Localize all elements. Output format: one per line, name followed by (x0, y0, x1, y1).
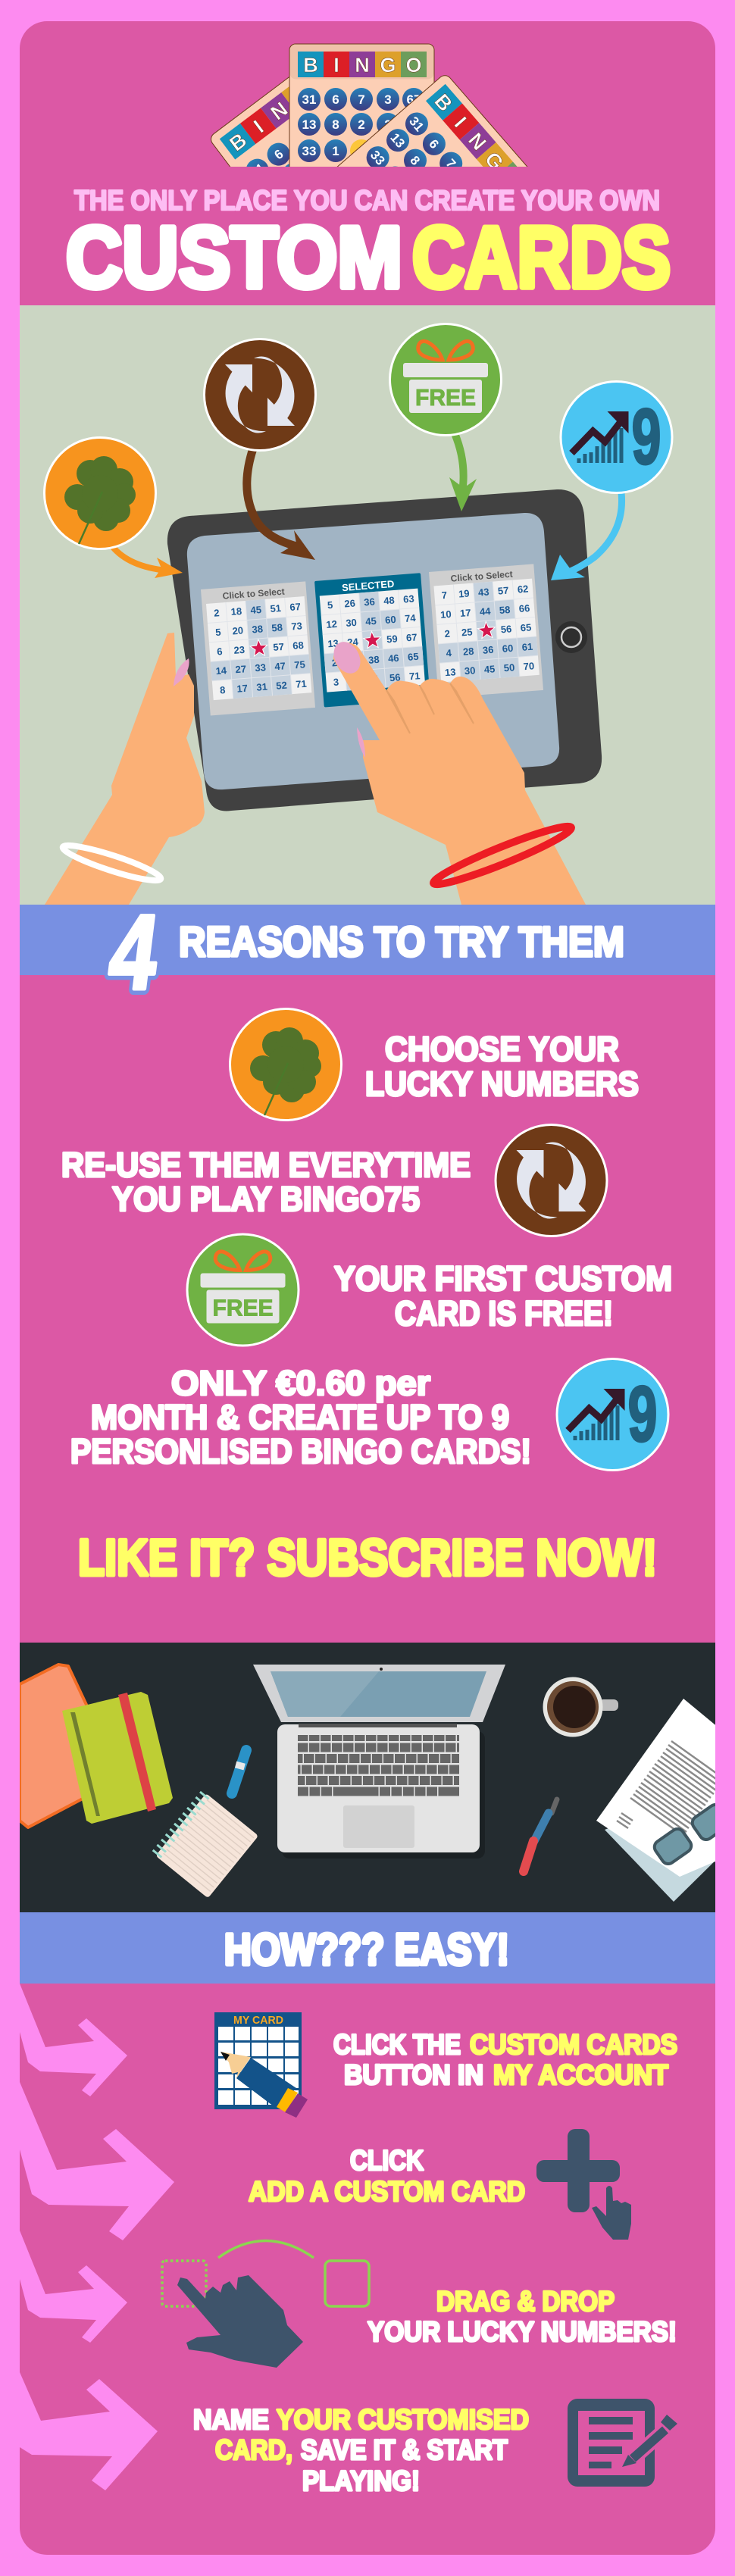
reason 2: RE-USE THEM EVERYTIME (61, 1146, 471, 1184)
card: click to select right: 7 (441, 589, 448, 601)
step 2: text: CLICK (350, 2145, 424, 2176)
card: click to select left: 51 (270, 602, 281, 614)
icon: chart and nine: 9 (632, 393, 661, 481)
panel: desk illustration (20, 1643, 732, 1912)
arrow: green (449, 433, 477, 511)
card: click to select left: 33 (255, 661, 266, 674)
card: selected: 5 (372, 673, 379, 685)
keyboard (298, 1738, 459, 1791)
tablet screen (187, 513, 559, 789)
banner: 4 reasons: 4 (103, 893, 165, 1011)
left bingo card: I (249, 116, 267, 137)
reason 1 (230, 1009, 639, 1120)
card: selected: 24 (347, 636, 359, 648)
right bingo card: N (464, 129, 491, 155)
arrow: orange (112, 546, 183, 578)
card: selected: 12 (326, 618, 337, 630)
banner: 4 reasons (20, 893, 715, 1011)
title (66, 210, 671, 306)
right hand (329, 637, 586, 905)
icon: refresh (496, 1124, 607, 1236)
icon: free gift (389, 324, 502, 435)
white bracelet (61, 839, 163, 886)
card: selected: 63 (403, 592, 414, 605)
card: selected: SELECTED (342, 578, 395, 593)
card: click to select left: 71 (296, 678, 307, 690)
card: click to select left: 68 (292, 639, 304, 652)
card: click to select left: Click to Select (222, 586, 285, 602)
usb stick (232, 1750, 246, 1793)
card: click to select right: 10 (440, 608, 452, 621)
left bingo card: 8 (286, 167, 301, 183)
centre bingo card: I (333, 54, 339, 77)
pen (524, 1799, 557, 1871)
icon: gift (187, 1234, 299, 1346)
card: selected: 38 (368, 654, 380, 666)
step 1: icon my card (214, 2012, 308, 2118)
card: click to select right: Click to Select (450, 569, 513, 584)
icon: chart and nine (557, 1359, 668, 1470)
right bingo card: 7 (443, 156, 458, 171)
centre bingo card: B (303, 54, 318, 77)
card: click to select left: 67 (289, 601, 301, 613)
card: click to select right: 45 (483, 663, 496, 675)
centre bingo card: 31 (302, 92, 316, 107)
tablet body (167, 489, 602, 811)
card: click to select left: 73 (291, 620, 302, 632)
step 3: text (368, 2286, 677, 2347)
step 4: text: CARD, (215, 2434, 292, 2465)
card: click to select right: 25 (461, 626, 473, 638)
centre bingo card: 7 (358, 92, 365, 107)
step 4: icon document and pencil (568, 2399, 677, 2487)
title: CUSTOM (66, 210, 402, 306)
card: selected: 3 (333, 676, 339, 688)
card: click to select right: 58 (499, 604, 511, 616)
arrow: step 3 (20, 2231, 127, 2343)
green notebook (62, 1692, 173, 1824)
card: click to select left: 31 (256, 681, 267, 693)
card: click to select right: 60 (502, 642, 514, 655)
card: click to select left: 18 (230, 605, 242, 617)
card: selected: 59 (386, 633, 398, 645)
centre bingo card: 33 (302, 144, 316, 158)
step 4: text: YOUR CUSTOMISED (277, 2404, 529, 2435)
step 4: text: PLAYING! (302, 2465, 420, 2496)
centre bingo card (289, 44, 435, 167)
card: selected: 67 (405, 631, 418, 643)
card: selected: 48 (383, 594, 395, 607)
step 1: text: BUTTON IN (344, 2059, 483, 2090)
laptop (253, 1665, 505, 1859)
step 3: text: YOUR LUCKY NUMBERS! (368, 2316, 677, 2347)
card: selected (314, 573, 430, 708)
card: click to select right: 57 (497, 585, 509, 597)
card: click to select left: 75 (294, 658, 305, 671)
card: selected: 26 (344, 597, 355, 610)
card: click to select right: 43 (477, 586, 489, 599)
card: selected: 30 (346, 617, 357, 629)
title: CARDS (412, 210, 671, 306)
subtitle: THE ONLY PLACE YOU CAN CREATE YOUR OWN (74, 185, 660, 216)
reason 4: MONTH & CREATE UP TO 9 (91, 1398, 509, 1436)
centre bingo card: 67 (407, 92, 421, 107)
card: click to select right: 17 (459, 607, 471, 619)
card: click to select left: 47 (274, 660, 286, 672)
reason 3 (187, 1234, 672, 1346)
centre bingo card: O (405, 54, 422, 77)
step 4: text: NAME (193, 2404, 269, 2435)
card: click to select left: 8 (220, 684, 226, 696)
left bingo card: 6 (271, 147, 286, 162)
arrow: blue (551, 492, 622, 580)
card: selected: 56 (389, 671, 401, 683)
card: click to select left (201, 581, 315, 716)
card: click to select right: 19 (458, 587, 470, 600)
card: selected: 2 (331, 657, 338, 669)
arrow: step 2 (20, 2082, 174, 2240)
reason 2: YOU PLAY BINGO75 (112, 1180, 420, 1218)
card: click to select left: 5 (215, 627, 221, 638)
centre bingo card: 2 (358, 117, 365, 132)
icon: clover (230, 1009, 341, 1120)
centre bingo card: 8 (332, 117, 339, 132)
step 2: icon plus with hand (536, 2129, 631, 2240)
reason 1: CHOOSE YOUR (385, 1030, 619, 1068)
card: click to select right: 56 (500, 623, 512, 635)
illustration: bingo cards (211, 44, 527, 167)
card: selected: 65 (407, 651, 419, 663)
reason 3: CARD IS FREE! (395, 1294, 613, 1333)
reason 4: PERSONLISED BINGO CARDS! (70, 1432, 531, 1471)
right bingo card: B (430, 89, 457, 116)
centre bingo card: N (355, 54, 370, 77)
card: click to select left: 2 (214, 607, 220, 619)
card: click to select left: 23 (233, 644, 246, 656)
reason 4 (70, 1359, 668, 1471)
left bingo card: 31 (248, 161, 267, 180)
card: click to select right: 30 (464, 664, 476, 677)
step 2: text (249, 2145, 525, 2207)
card: click to select right: 66 (518, 602, 530, 614)
card: click to select right: 62 (517, 583, 529, 596)
step 4: text: SAVE IT & START (301, 2434, 508, 2465)
card: click to select right: 44 (479, 605, 492, 617)
card: click to select right: 50 (503, 661, 515, 674)
card: selected: 46 (388, 652, 399, 664)
right bingo card: 33 (368, 148, 388, 168)
arrow: step 1 (20, 1984, 127, 2096)
centre bingo card: 13 (302, 117, 316, 132)
reason 2 (61, 1124, 607, 1236)
step 1: text (333, 2029, 677, 2090)
right bingo card: 6 (426, 136, 442, 152)
card: click to select right: 65 (520, 621, 532, 633)
card: click to select left: 6 (217, 646, 223, 658)
card: click to select left: 17 (236, 683, 248, 695)
left bingo card (211, 77, 289, 167)
step 3: icon drag and drop (162, 2241, 369, 2368)
card: selected: 36 (364, 596, 375, 608)
step 4: text (193, 2404, 529, 2496)
card: click to select right: 61 (521, 641, 533, 653)
left hand (45, 633, 205, 905)
arrow: brown (247, 449, 315, 560)
right bingo card (336, 75, 527, 167)
banner: 4 reasons: REASONS TO TRY THEM (179, 918, 624, 965)
reason 4: ONLY €0.60 per (171, 1364, 430, 1402)
reason 3: YOUR FIRST CUSTOM (334, 1259, 672, 1298)
card: click to select right: 4 (446, 647, 452, 659)
spiral notepad (155, 1793, 258, 1898)
step 1: text: CLICK THE (333, 2029, 461, 2060)
card: click to select left: 52 (276, 680, 287, 692)
icon: free gift: FREE (415, 384, 476, 411)
right bingo card: G (480, 148, 508, 174)
card: selected: 74 (405, 612, 417, 624)
card: selected: 60 (385, 614, 396, 626)
step 1: icon my card: MY CARD (233, 2014, 283, 2027)
right bingo card: I (450, 112, 471, 132)
centre bingo card: 1 (332, 144, 339, 158)
icon: chart and nine: 9 (627, 1371, 658, 1458)
paper stack (596, 1699, 727, 1902)
centre bingo card: G (380, 54, 396, 77)
panel: tablet scene (20, 305, 715, 905)
card: click to select left: 14 (215, 664, 227, 677)
card: click to select left: 27 (235, 663, 247, 675)
red bracelet (430, 820, 574, 891)
banner: how easy (20, 1912, 715, 1984)
step 1: text: MY ACCOUNT (493, 2059, 668, 2090)
card: selected: 45 (365, 615, 377, 627)
card: click to select left: 45 (250, 604, 262, 616)
card: click to select left: 20 (232, 624, 244, 636)
card: click to select left: 38 (252, 623, 264, 635)
right bingo card: 13 (387, 130, 408, 151)
icon: gift: FREE (212, 1294, 273, 1321)
card: click to select right: 13 (444, 666, 456, 678)
scene background (20, 305, 715, 905)
centre bingo card: 6 (332, 92, 339, 107)
arrow: step 4 (20, 2372, 158, 2490)
reason 1: LUCKY NUMBERS (365, 1064, 639, 1103)
left bingo card: B (225, 129, 251, 155)
left bingo card: 13 (263, 180, 283, 201)
step 1: text: CUSTOM CARDS (470, 2029, 677, 2060)
banner: 4 reasons: 4 (103, 893, 165, 1011)
card: click to select left: 58 (271, 621, 283, 633)
card: click to select right: 70 (523, 660, 535, 672)
icon: chart and nine (561, 382, 672, 492)
icon: four-leaf clover (44, 438, 156, 549)
card: click to select right: 28 (462, 646, 474, 658)
orange folder (20, 1665, 86, 1827)
step 2: text: ADD A CUSTOM CARD (249, 2176, 525, 2207)
card: selected: 71 (408, 670, 421, 682)
banner: how easy: HOW??? EASY! (224, 1925, 509, 1974)
card: click to select right: 2 (444, 628, 450, 639)
right bingo card: 8 (407, 153, 423, 168)
centre bingo card: 3 (384, 92, 392, 107)
glasses (653, 1803, 715, 1865)
card: click to select right (429, 564, 543, 699)
step 3: text: DRAG & DROP (436, 2286, 615, 2317)
card: selected: 13 (327, 637, 339, 649)
right bingo card: 31 (406, 114, 427, 134)
card: selected: 5 (327, 599, 333, 611)
home button (555, 621, 587, 653)
icon: refresh (205, 339, 315, 450)
centre bingo card: 2 (384, 117, 392, 132)
left bingo card: N (267, 98, 292, 124)
card: click to select left: 57 (273, 641, 284, 653)
card: click to select right: 36 (482, 644, 494, 656)
coffee cup (543, 1677, 618, 1737)
